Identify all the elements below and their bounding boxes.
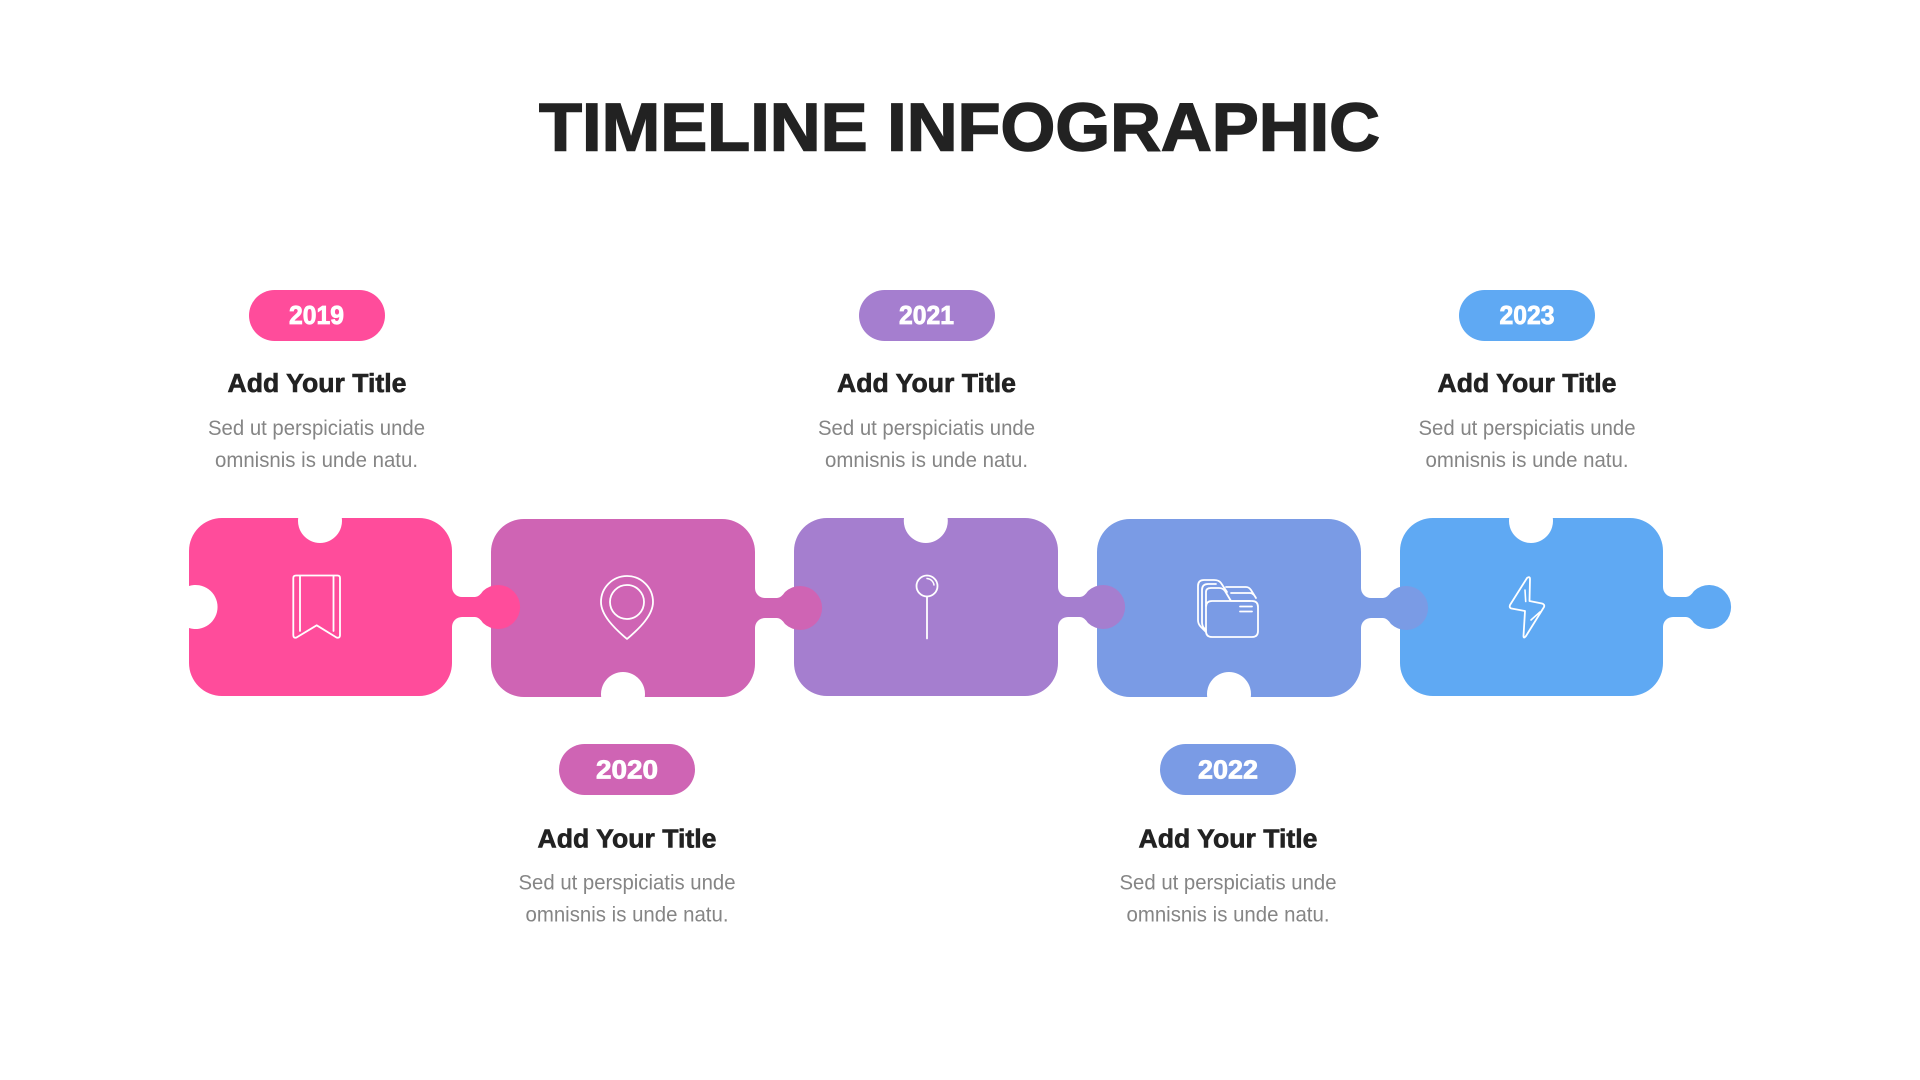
year label: 2021: 2021 (899, 302, 954, 330)
icon: folders (1198, 580, 1258, 637)
year pill: 2023 (1459, 290, 1595, 341)
year pill: 2019 (249, 290, 385, 341)
description: 2021: Sed ut perspiciatis unde (818, 417, 1035, 440)
puzzle piece 2019 (189, 518, 520, 696)
icon: lollipop pin (916, 576, 938, 638)
puzzle piece 2020 (491, 519, 822, 697)
icon: lightning bolt (1510, 577, 1544, 638)
heading: 2020: Add Your Title (538, 826, 716, 854)
year label: 2023: 2023 (1500, 302, 1554, 330)
column: 2020 (518, 744, 736, 926)
column: 2022 (1120, 744, 1336, 926)
column: 2021 (818, 290, 1035, 472)
puzzle piece 2021 (794, 518, 1125, 696)
description: 2020: Sed ut perspiciatis unde (518, 872, 736, 894)
description: 2022: Sed ut perspiciatis unde (1120, 872, 1336, 894)
description: 2021: omnisnis is unde natu. (825, 449, 1028, 472)
year label: 2020: 2020 (596, 756, 658, 784)
column: 2023 (1418, 290, 1636, 472)
heading: 2023: Add Your Title (1438, 370, 1616, 398)
title: TIMELINE INFOGRAPHIC (539, 90, 1380, 166)
icon: map pin (601, 576, 653, 639)
year pill: 2020 (559, 744, 695, 795)
year label: 2019: 2019 (289, 302, 344, 330)
puzzle timeline (189, 518, 1731, 697)
year pill: 2021 (859, 290, 995, 341)
description: 2019: omnisnis is unde natu. (215, 449, 418, 472)
heading: 2021: Add Your Title (837, 370, 1016, 398)
description: 2020: omnisnis is unde natu. (526, 904, 728, 926)
year label: 2022: 2022 (1198, 756, 1258, 784)
puzzle piece 2023 (1400, 518, 1731, 696)
description: 2019: Sed ut perspiciatis unde (208, 417, 425, 440)
column: 2019 (208, 290, 425, 472)
icon: bookmark (293, 576, 340, 638)
heading: 2022: Add Your Title (1138, 826, 1318, 854)
heading: 2019: Add Your Title (228, 370, 406, 398)
year pill: 2022 (1160, 744, 1296, 795)
description: 2022: omnisnis is unde natu. (1126, 904, 1330, 926)
description: 2023: omnisnis is unde natu. (1426, 449, 1628, 472)
description: 2023: Sed ut perspiciatis unde (1418, 417, 1636, 440)
puzzle piece 2022 (1097, 519, 1428, 697)
